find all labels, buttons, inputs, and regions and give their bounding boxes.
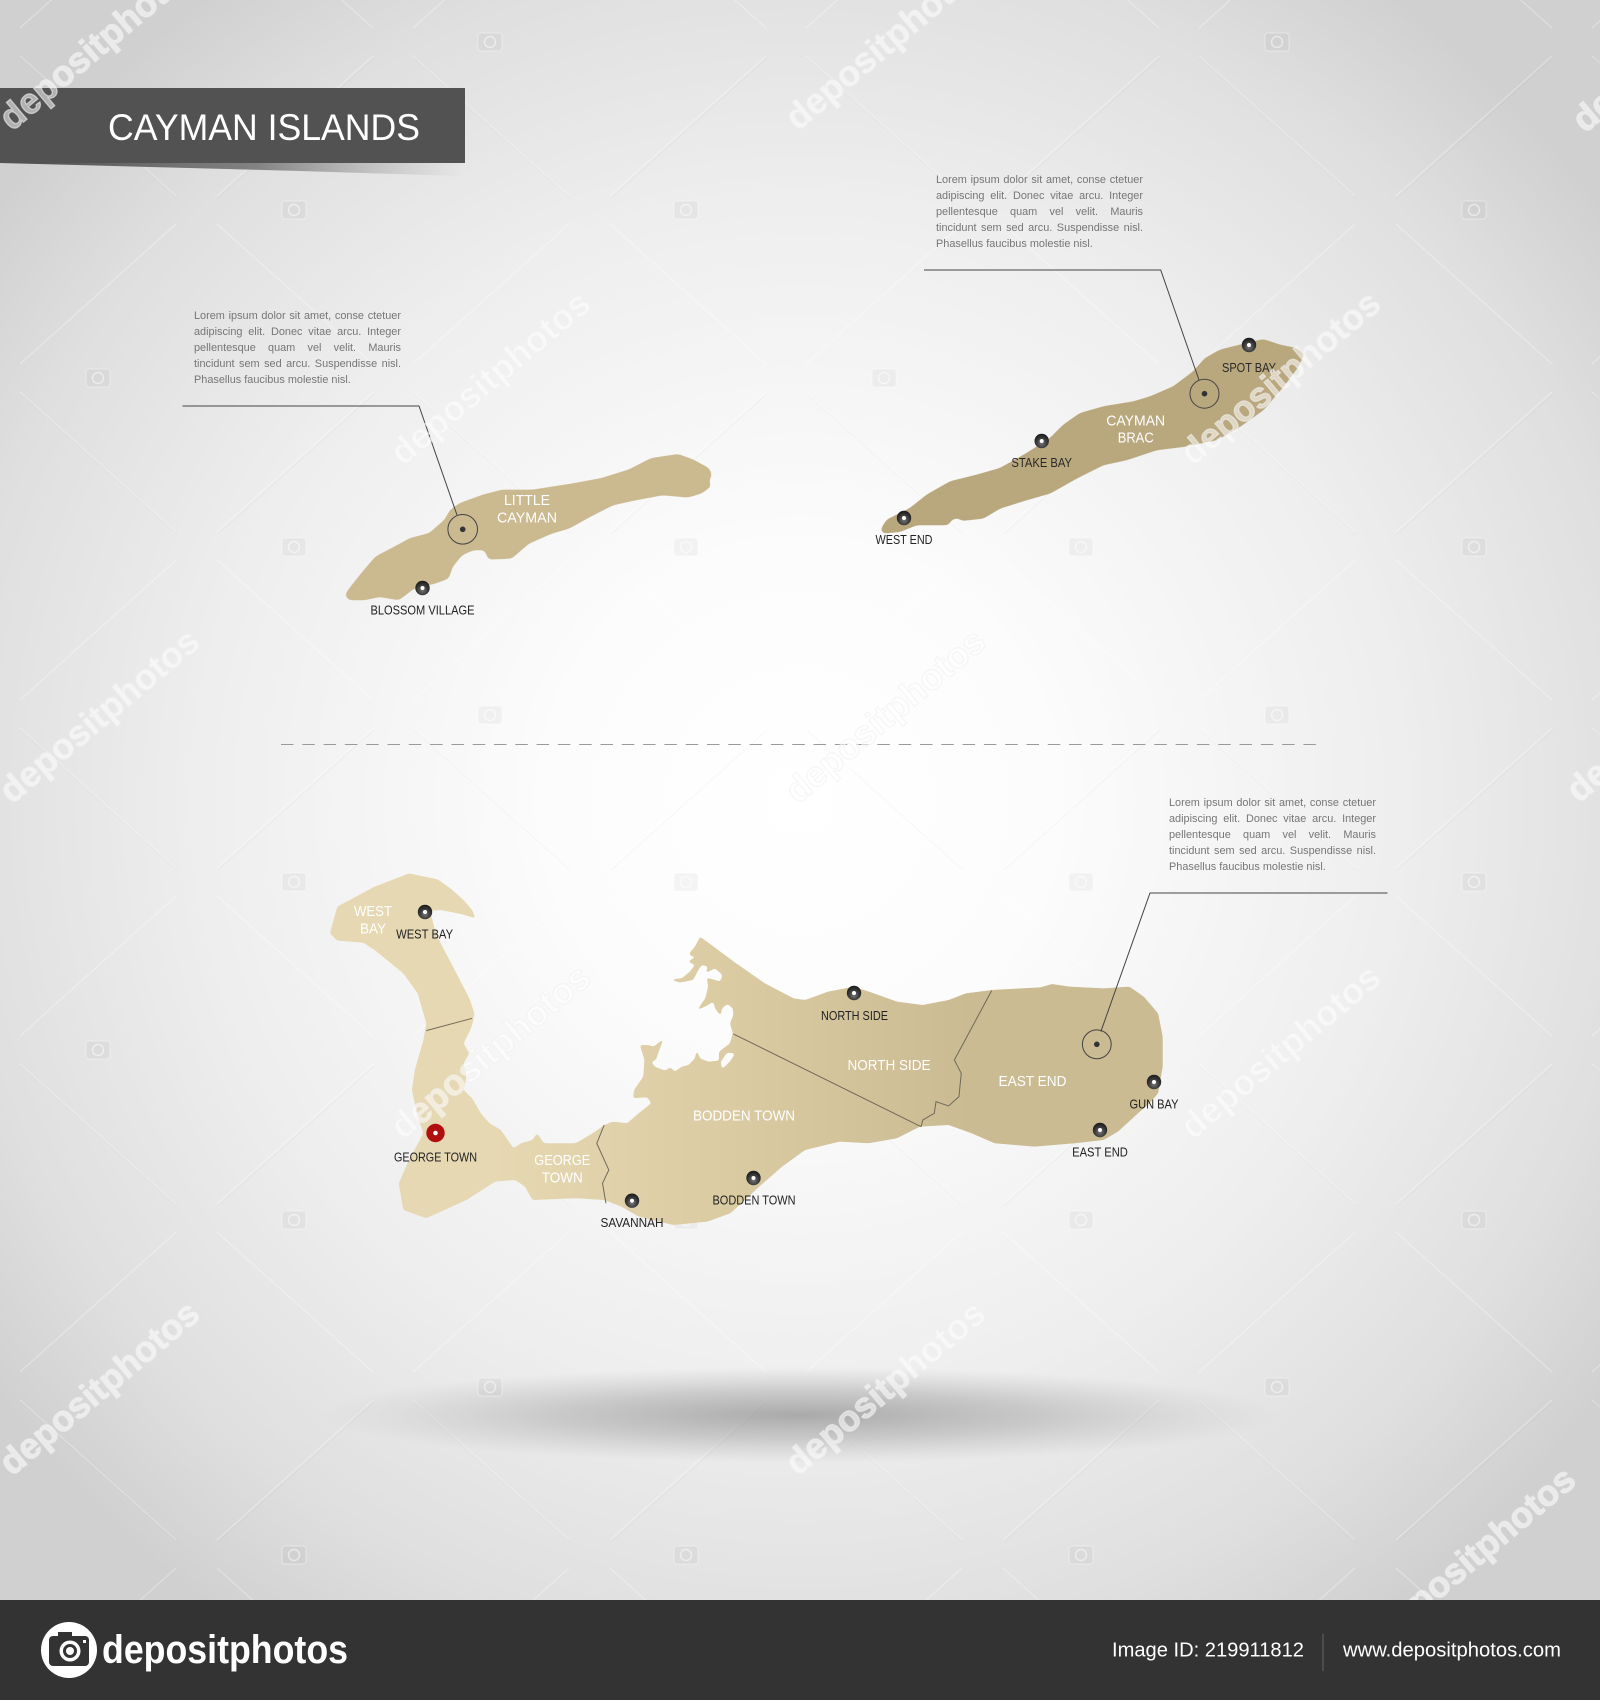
watermark text: depositphotos <box>1172 956 1388 1147</box>
map: Grand Cayman <box>330 873 1179 1230</box>
text block: Cayman Brac: pellentesque quam vel velit. Mauris <box>936 206 1143 218</box>
town labels: EAST END <box>1072 1146 1128 1160</box>
text block: Grand Cayman: Phasellus faucibus molestie nisl. <box>1169 861 1326 873</box>
district names: BAY <box>360 920 386 938</box>
title banner: CAYMAN ISLANDS <box>108 107 420 148</box>
ground shadow <box>320 1367 1280 1463</box>
text block: Grand Cayman: Lorem ipsum dolor sit amet, conse ctetuer <box>1169 797 1376 809</box>
map: Cayman Brac <box>876 338 1304 547</box>
district names: EAST END <box>998 1073 1067 1090</box>
text block: Little Cayman: tincidunt sem sed arcu. Suspendisse nisl. <box>194 358 401 370</box>
text block: Grand Cayman <box>1169 797 1376 873</box>
map: Little Cayman <box>345 454 712 618</box>
text block: Little Cayman: Lorem ipsum dolor sit amet, conse ctetuer <box>194 310 401 322</box>
watermark text: depositphotos <box>1172 282 1388 473</box>
district names <box>354 903 1067 1186</box>
district names: BODDEN TOWN <box>693 1108 795 1124</box>
town labels: GEORGE TOWN <box>394 1150 477 1164</box>
map: Cayman Brac: STAKE BAY <box>1011 456 1073 470</box>
town labels <box>394 928 1179 1230</box>
watermark text: depositphotos <box>382 956 598 1147</box>
town labels: NORTH SIDE <box>821 1009 888 1023</box>
callout leader: Little Cayman <box>182 406 478 544</box>
text block: Cayman Brac: Lorem ipsum dolor sit amet, conse ctetuer <box>936 174 1143 186</box>
footer bar <box>0 1600 1600 1700</box>
map: Cayman Brac: CAYMAN <box>1106 412 1165 430</box>
callout leader: Cayman Brac <box>924 270 1219 408</box>
map: Little Cayman: BLOSSOM VILLAGE <box>370 604 474 618</box>
district names: WEST <box>354 903 392 920</box>
text block: Little Cayman: Phasellus faucibus molestie nisl. <box>194 374 351 386</box>
callout leader: Grand Cayman <box>1082 893 1388 1059</box>
website: www.depositphotos.com <box>1342 1640 1561 1662</box>
district names: NORTH SIDE <box>848 1057 930 1074</box>
text block: Grand Cayman: pellentesque quam vel velit. Mauris <box>1169 829 1376 841</box>
map: Cayman Brac: WEST END <box>876 533 932 547</box>
text block: Cayman Brac: adipiscing elit. Donec vitae arcu. Integer <box>936 190 1143 202</box>
text block: Grand Cayman: adipiscing elit. Donec vitae arcu. Integer <box>1169 813 1376 825</box>
town labels: WEST BAY <box>396 928 454 942</box>
map: Cayman Brac: SPOT BAY <box>1222 361 1277 375</box>
watermark text: depositphotos <box>777 620 993 811</box>
town pins <box>418 905 1161 1208</box>
map: Little Cayman: LITTLE <box>504 492 550 509</box>
capital pin: George Town <box>426 1124 445 1142</box>
footer logo text: depositphotos <box>102 1628 348 1672</box>
dashed divider <box>281 744 1320 746</box>
text block: Cayman Brac: tincidunt sem sed arcu. Suspendisse nisl. <box>936 222 1143 234</box>
watermark text: depositphotos <box>777 1292 993 1483</box>
image id: Image ID: 219911812 <box>1112 1640 1304 1662</box>
title banner <box>0 88 465 176</box>
text block: Cayman Brac: Phasellus faucibus molestie nisl. <box>936 238 1093 250</box>
map: Little Cayman: CAYMAN <box>497 510 557 526</box>
district names: TOWN <box>542 1170 583 1186</box>
watermark camera icons <box>86 33 1486 1564</box>
watermark text: depositphotos <box>1367 1458 1583 1649</box>
town labels: BODDEN TOWN <box>712 1194 796 1208</box>
watermark text: depositphotos <box>382 282 598 473</box>
footer logo icon <box>41 1622 97 1678</box>
text block: Little Cayman: adipiscing elit. Donec vitae arcu. Integer <box>194 326 401 338</box>
text block: Cayman Brac <box>936 174 1143 250</box>
district names: GEORGE <box>534 1152 590 1169</box>
map: Cayman Brac: BRAC <box>1118 430 1154 446</box>
text block: Little Cayman: pellentesque quam vel velit. Mauris <box>194 342 401 354</box>
town labels: GUN BAY <box>1130 1098 1179 1112</box>
town labels: SAVANNAH <box>600 1216 664 1230</box>
district borders <box>426 991 992 1203</box>
text block: Little Cayman <box>194 310 401 386</box>
text block: Grand Cayman: tincidunt sem sed arcu. Suspendisse nisl. <box>1169 845 1376 857</box>
